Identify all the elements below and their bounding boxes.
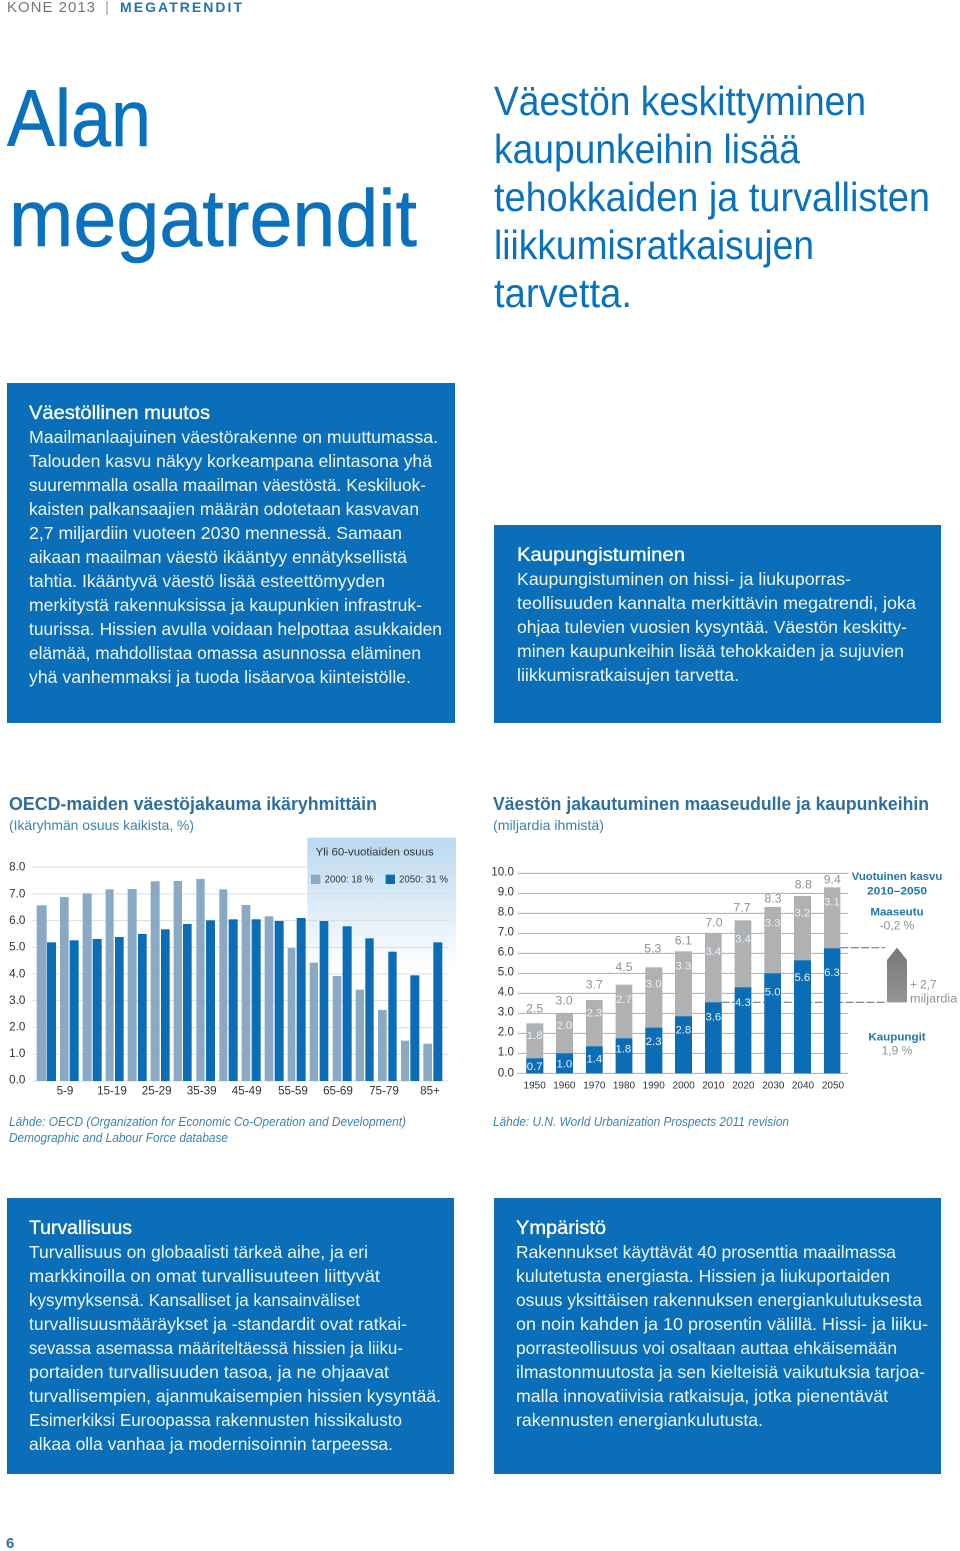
panel: Ympäristö: kulutetusta energiasta. Hissien ja liukuportaiden (516, 1266, 890, 1286)
x axis labels: 2050 (822, 1080, 845, 1091)
heading: OECD chart: (Ikäryhmän osuus kaikista, %) (9, 817, 194, 833)
y axis labels: 5.0 (498, 966, 515, 979)
panel: Väestöllinen muutos (7, 383, 455, 723)
panel: Väestöllinen muutos: Maailmanlaajuinen väestörakenne on muuttumassa. (29, 427, 438, 447)
x axis labels: 15-19 (97, 1084, 127, 1097)
panel: Kaupungistuminen (494, 525, 941, 723)
x axis labels: 85+ (420, 1084, 440, 1097)
urban values (527, 967, 840, 1073)
panel: Turvallisuus: sevassa asemassa määriteltäessä hissien ja liiku- (29, 1338, 403, 1358)
y axis labels: 8.0 (498, 906, 515, 919)
title: Alan (7, 74, 151, 164)
legend: Yli 60-vuotiaiden osuus (316, 847, 434, 859)
panel: Ympäristö: Ympäristö (516, 1218, 606, 1239)
y axis labels: 4.0 (498, 986, 515, 999)
totals: 6.1 (675, 934, 692, 948)
panel: Väestöllinen muutos: 2,7 miljardiin vuoteen 2030 mennessä. Samaan (29, 523, 402, 543)
heading: urbanization chart: Väestön jakautuminen maaseudulle ja kaupunkeihin (493, 793, 929, 814)
urban values: 2.3 (646, 1036, 662, 1048)
y axis labels: 10.0 (491, 866, 515, 879)
y axis labels: 2.0 (498, 1026, 515, 1039)
annual growth legend: -0,2 % (880, 919, 915, 933)
annual growth legend: Vuotuinen kasvu (852, 871, 942, 883)
panel: Turvallisuus: portaiden turvallisuuden tasoa, ja ne ohjaavat (29, 1362, 389, 1382)
x axis labels: 45-49 (232, 1084, 262, 1097)
rural values: 3.4 (705, 946, 721, 958)
totals: 3.7 (586, 978, 603, 992)
bars: rural (526, 887, 840, 1073)
x axis labels: 1970 (583, 1080, 606, 1091)
panel: Turvallisuus: kysymyksensä. Kansalliset ja kansainväliset (29, 1290, 360, 1310)
x axis labels (524, 1080, 845, 1091)
panel: Väestöllinen muutos: yhä vanhemmaksi ja tuoda lisäarvoa kiinteistölle. (29, 667, 411, 687)
rural values: 3.2 (794, 908, 810, 920)
intro heading: tehokkaiden ja turvallisten (494, 174, 930, 220)
source: OECD (9, 1114, 406, 1145)
title (7, 74, 417, 264)
panel: Turvallisuus: markkinoilla on omat turvallisuuteen liittyvät (29, 1266, 380, 1286)
annual growth legend: 2010–2050 (867, 885, 927, 897)
dashed guides (722, 948, 885, 1002)
source: OECD: Lähde: OECD (Organization for Economic Co-Operation and Development) (9, 1114, 406, 1129)
rural values: 1.8 (527, 1030, 543, 1042)
heading: OECD chart (9, 793, 377, 833)
panel: Väestöllinen muutos: tuurissa. Hissien avulla voidaan helpottaa asukkaiden (29, 619, 442, 639)
legend (311, 847, 448, 886)
panel: Kaupungistuminen: ohjaa tulevien vuosien kysyntää. Väestön keskitty- (517, 617, 907, 637)
panel: Väestöllinen muutos: kaisten palkansaajien määrän odotetaan kasvavan (29, 499, 419, 519)
totals: 7.0 (705, 915, 723, 929)
panel: Ympäristö: porrasteollisuus voi osaltaan auttaa ehkäisemään (516, 1338, 897, 1358)
x axis labels: 2010 (702, 1080, 725, 1091)
urban values: 1.4 (586, 1053, 602, 1065)
panel: Väestöllinen muutos: tahtia. Ikääntyvä väestö lisää esteettömyyden (29, 571, 385, 591)
panel: Väestöllinen muutos: Talouden kasvu näkyy korkeampana elintasona yhä (29, 451, 432, 471)
growth callout: + 2,7 (910, 978, 937, 992)
panel: Turvallisuus: Turvallisuus (29, 1218, 132, 1239)
x axis labels: 1950 (524, 1080, 546, 1091)
y axis labels: 9.0 (498, 886, 515, 899)
panel: Ympäristö: malla innovatiivisia ratkaisuja, jotka pienentävät (516, 1386, 888, 1406)
x axis labels: 2000 (673, 1080, 695, 1091)
panel: Kaupungistuminen: Kaupungistuminen (517, 545, 685, 566)
rural values: 2.0 (556, 1020, 572, 1032)
panel: Ympäristö (494, 1198, 941, 1474)
intro heading: kaupunkeihin lisää (494, 126, 800, 172)
x axis labels: 1980 (613, 1080, 636, 1091)
annual growth legend: 1,9 % (882, 1044, 913, 1058)
legend: 2000: 18 % (325, 875, 373, 886)
panel: Ympäristö: ilmastonmuutosta ja sen kielteisiä vaikutuksia tarjoa- (516, 1362, 925, 1382)
urban values: 1.8 (615, 1043, 631, 1055)
urban values: 1.0 (556, 1058, 572, 1070)
panel: Väestöllinen muutos: merkitystä rakennuksissa ja kaupunkien infrastruk- (29, 595, 422, 615)
bars: 2050 (47, 918, 442, 1081)
panel: Turvallisuus (7, 1198, 454, 1474)
totals: 9.4 (824, 873, 841, 887)
totals (526, 873, 841, 1016)
panel: Ympäristö: on noin kahden ja 10 prosentin välillä. Hissi- ja liiku- (516, 1314, 928, 1334)
y axis labels: 1.0 (9, 1047, 26, 1060)
totals: 3.0 (555, 993, 573, 1007)
y axis labels (9, 860, 26, 1087)
x axis labels: 2020 (732, 1080, 755, 1091)
rural values: 3.3 (765, 918, 781, 930)
y axis labels: 0.0 (9, 1074, 26, 1087)
panel: Turvallisuus: turvallisuusmääräykset ja -standardit ovat ratkai- (29, 1314, 407, 1334)
panel: Ympäristö: osuus yksittäisen rakennuksen energiankulutuksesta (516, 1290, 922, 1310)
source: UN: Lähde: U.N. World Urbanization Prospects 2011 revision (493, 1114, 789, 1129)
y axis labels: 6.0 (9, 914, 26, 927)
heading: urbanization chart: (miljardia ihmistä) (493, 817, 604, 833)
icon: growth arrow (887, 948, 907, 1002)
heading: urbanization chart (493, 793, 929, 833)
panel: Väestöllinen muutos: elämää, mahdollistaa omassa asunnossa eläminen (29, 643, 421, 663)
x axis labels: 1990 (643, 1080, 665, 1091)
rural values: 2.3 (586, 1008, 602, 1020)
y axis labels: 1.0 (498, 1046, 515, 1059)
bar chart: rural and urban population (491, 866, 958, 1091)
x axis labels: 35-39 (187, 1084, 217, 1097)
panel: Kaupungistuminen: liikkumisratkaisujen tarvetta. (517, 665, 739, 685)
source: OECD: Demographic and Labour Force database (9, 1130, 228, 1145)
x axis labels: 2040 (792, 1080, 815, 1091)
legend: 2050: 31 % (399, 875, 448, 886)
x axis labels: 75-79 (369, 1084, 399, 1097)
panel: Väestöllinen muutos: aikaan maailman väestö ikääntyy ennätyksellistä (29, 547, 407, 567)
annual growth legend: Maaseutu (870, 907, 924, 919)
panel: Ympäristö: Rakennukset käyttävät 40 prosenttia maailmassa (516, 1242, 896, 1262)
rural values (527, 896, 840, 1042)
totals: 4.5 (615, 960, 633, 974)
totals: 7.7 (733, 900, 751, 914)
growth callout (910, 978, 958, 1006)
y axis labels: 6.0 (498, 946, 515, 959)
annual growth legend: Kaupungit (868, 1031, 926, 1043)
page header (7, 0, 242, 16)
title: megatrendit (9, 174, 417, 264)
x axis labels: 55-59 (278, 1084, 308, 1097)
y axis labels: 5.0 (9, 941, 26, 954)
y axis labels: 2.0 (9, 1020, 26, 1033)
panel: Turvallisuus: turvallisempien, ajanmukaisempien hissien kysyntää. (29, 1386, 441, 1406)
x axis labels: 2030 (762, 1080, 785, 1091)
panel: Turvallisuus: Turvallisuus on globaalisti tärkeä aihe, ja eri (29, 1242, 368, 1262)
panel: Ympäristö: rakennusten energiankulutusta. (516, 1410, 763, 1430)
urban values: 6.3 (824, 967, 840, 979)
intro heading: Väestön keskittyminen (494, 78, 866, 124)
panel: Kaupungistuminen: teollisuuden kannalta merkittävin megatrendi, joka (517, 593, 916, 613)
panel: Turvallisuus: alkaa olla vanhaa ja modernisoinnin tarpeessa. (29, 1434, 393, 1454)
rural values: 2.7 (616, 994, 632, 1006)
y axis labels: 7.0 (9, 887, 26, 900)
x axis labels: 25-29 (142, 1084, 172, 1097)
panel: Väestöllinen muutos: suuremmalla osalla maailman väestöstä. Keskiluok- (29, 475, 426, 495)
bar chart: OECD age distribution (9, 838, 456, 1097)
y axis labels: 0.0 (498, 1066, 515, 1079)
annual growth legend (852, 871, 942, 1058)
urban values: 5.0 (765, 987, 781, 999)
urban values: 5.6 (794, 972, 810, 984)
panel: Väestöllinen muutos: Väestöllinen muutos (29, 403, 210, 424)
x axis labels: 1960 (553, 1080, 576, 1091)
urban values: 2.8 (675, 1024, 691, 1036)
x axis labels: 5-9 (57, 1084, 73, 1097)
heading: OECD chart: OECD-maiden väestöjakauma ikäryhmittäin (9, 793, 377, 814)
y axis labels: 3.0 (498, 1006, 515, 1019)
bars: 2000 (37, 879, 432, 1081)
x axis labels: 65-69 (323, 1084, 353, 1097)
rural values: 3.1 (824, 896, 840, 908)
panel: Kaupungistuminen: minen kaupunkeihin lisää tehokkaiden ja sujuvien (517, 641, 904, 661)
y axis labels: 7.0 (498, 926, 515, 939)
totals: 2.5 (526, 1002, 543, 1016)
urban values: 4.3 (735, 997, 751, 1009)
y axis labels: 3.0 (9, 994, 26, 1007)
urban values: 0.7 (527, 1061, 543, 1073)
totals: 8.3 (764, 891, 782, 905)
rural values: 3.0 (646, 979, 662, 991)
panel: Kaupungistuminen: Kaupungistuminen on hissi- ja liukuporras- (517, 569, 851, 589)
rural values: 3.4 (735, 933, 751, 945)
intro heading: liikkumisratkaisujen (494, 222, 814, 268)
rural values: 3.3 (675, 960, 691, 972)
intro heading (494, 78, 930, 316)
urban values: 3.6 (705, 1012, 721, 1024)
bars: urban (526, 948, 840, 1073)
growth callout: miljardia (910, 992, 958, 1006)
x axis labels (57, 1084, 440, 1097)
y axis labels (491, 866, 515, 1079)
intro heading: tarvetta. (494, 270, 632, 316)
panel: Turvallisuus: Esimerkiksi Euroopassa rakennusten hissikalusto (29, 1410, 402, 1430)
totals: 8.8 (795, 878, 812, 892)
y axis labels: 4.0 (9, 967, 26, 980)
y axis labels: 8.0 (9, 860, 26, 873)
totals: 5.3 (644, 942, 661, 956)
